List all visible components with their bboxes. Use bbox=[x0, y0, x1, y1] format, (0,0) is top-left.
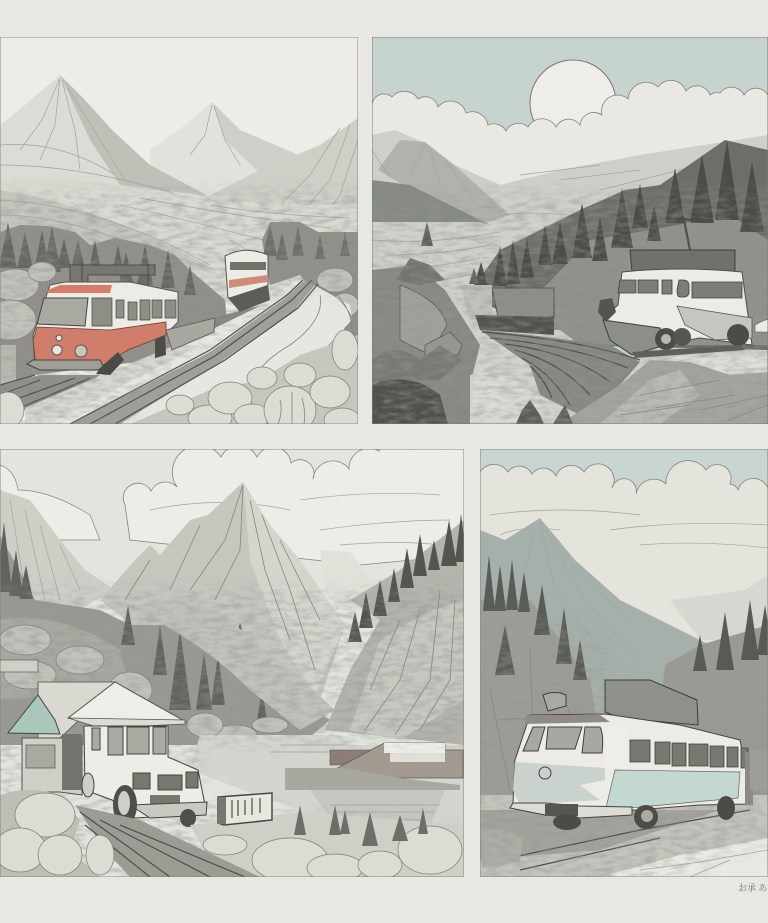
foreground road and shrubs bbox=[0, 790, 464, 882]
pine forest bbox=[474, 140, 768, 350]
clouds bbox=[372, 80, 768, 190]
distant train car bbox=[225, 250, 270, 312]
mountains bbox=[372, 130, 768, 225]
bus with luggage on roof bbox=[510, 680, 768, 830]
foreground hill bbox=[516, 357, 768, 424]
forest: left and right tree bands bbox=[0, 222, 358, 384]
white cabin truck bbox=[68, 682, 207, 827]
railway track curving into distance bbox=[0, 280, 352, 424]
grey wagon bbox=[460, 285, 554, 335]
moon bbox=[530, 60, 616, 126]
left forest and hills bbox=[0, 522, 335, 745]
wooden sign bbox=[218, 793, 272, 825]
panel: cabin truck at mountain lake bbox=[0, 449, 464, 877]
clouds bbox=[480, 460, 768, 643]
light ground bbox=[470, 330, 768, 424]
mountains: distant peaks bbox=[0, 75, 358, 205]
red train bbox=[27, 263, 215, 375]
round shrubs foreground bbox=[0, 330, 358, 424]
curved striped track bbox=[480, 330, 640, 415]
mountains bbox=[480, 518, 768, 800]
mountains bbox=[0, 482, 375, 700]
clouds bbox=[0, 450, 464, 566]
pencil shading texture bbox=[372, 184, 768, 424]
right rock face with pines bbox=[325, 514, 467, 745]
lake and distant train bbox=[191, 735, 464, 825]
pencil shading texture bbox=[0, 583, 464, 876]
panel: pale train beneath full moon bbox=[372, 37, 768, 424]
terraced fields bbox=[372, 212, 570, 330]
pencil shading texture bbox=[0, 184, 358, 424]
pencil shading texture bbox=[480, 619, 768, 876]
ground and road bbox=[480, 795, 768, 877]
artist signature: お承 あ bbox=[738, 883, 767, 893]
pines left bbox=[480, 556, 596, 795]
panel: teal bus on mountain road bbox=[480, 449, 768, 877]
valley: rolling fields bbox=[0, 179, 358, 300]
rocky cliffs left bbox=[372, 222, 480, 424]
house with teal gable bbox=[0, 660, 115, 795]
panel: red train in mountain valley bbox=[0, 37, 358, 424]
white train with roof rack bbox=[598, 218, 768, 358]
